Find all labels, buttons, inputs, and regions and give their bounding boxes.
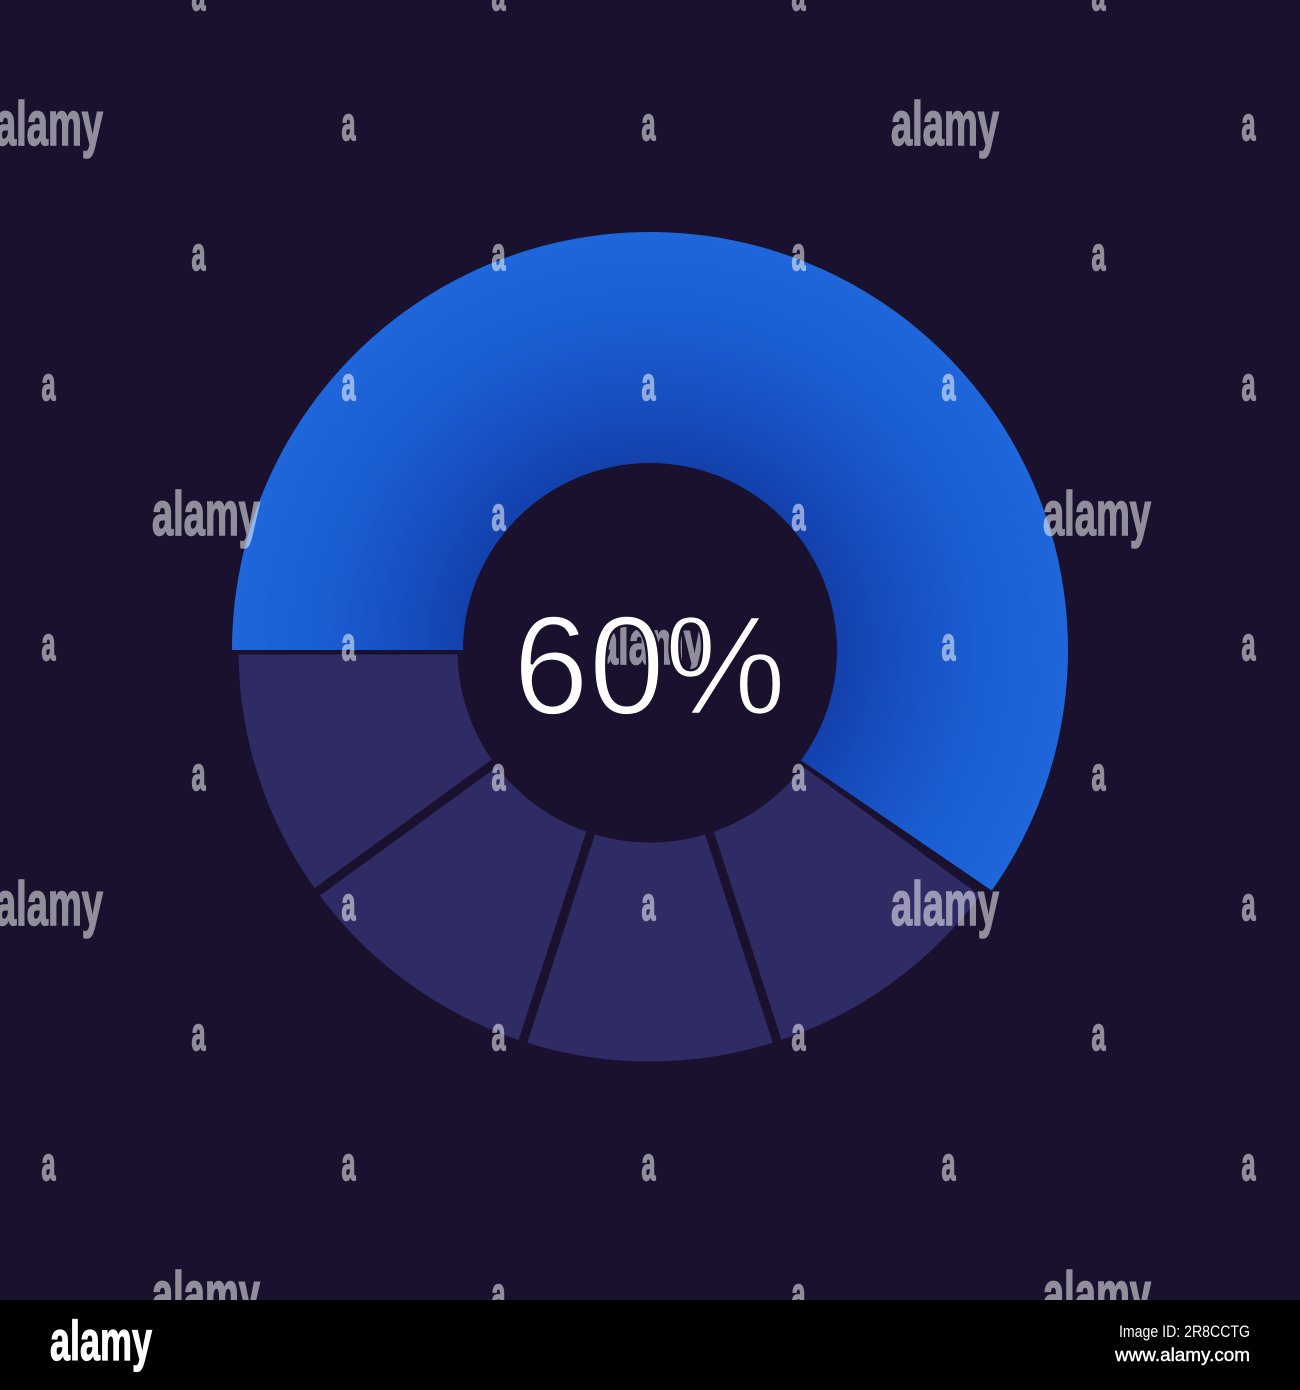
footer logo: alamy [50,1309,152,1372]
inactive segment 1 [708,760,987,1046]
watermark pattern: a [42,1137,56,1190]
watermark pattern: a [792,747,806,800]
image id: Image ID: 2R8CCTG [1119,1322,1250,1341]
watermark pattern: a [642,357,656,410]
watermark pattern: a [642,1137,656,1190]
watermark pattern: a [492,1007,506,1060]
inactive segment 4 [234,650,498,895]
watermark pattern: a [492,1267,506,1320]
watermark pattern: alamy [0,870,103,939]
watermark pattern: a [642,877,656,930]
watermark pattern: a [42,357,56,410]
watermark pattern: alamy [597,609,705,678]
watermark pattern: a [1242,357,1256,410]
watermark pattern: a [1092,1007,1106,1060]
center percentage label: 60% [513,586,786,744]
watermark pattern: a [342,1137,356,1190]
watermark pattern: a [792,1267,806,1320]
watermark pattern: a [1092,747,1106,800]
watermark pattern: a [942,617,956,670]
watermark pattern: alamy [891,90,999,159]
watermark pattern: a [342,357,356,410]
watermark pattern: a [792,1007,806,1060]
watermark pattern: a [792,487,806,540]
watermark pattern: a [342,617,356,670]
watermark pattern: a [792,227,806,280]
watermark pattern: a [342,877,356,930]
watermark pattern: a [492,747,506,800]
watermark pattern: a [492,487,506,540]
watermark pattern: a [1242,617,1256,670]
website url: www.alamy.com [1114,1345,1250,1365]
watermark pattern: a [642,97,656,150]
donut chart [232,232,1068,1066]
watermark pattern: alamy [152,480,260,549]
watermark pattern: a [1242,97,1256,150]
watermark pattern: alamy [891,870,999,939]
watermark pattern: a [492,227,506,280]
active blue arc 60 percent [232,232,1068,891]
watermark pattern: alamy [1043,1260,1151,1329]
watermark pattern: a [192,747,206,800]
watermark pattern: a [192,227,206,280]
watermark pattern: alamy [1043,480,1151,549]
footer bar [0,1300,1300,1390]
watermark pattern: alamy [0,90,103,159]
watermark pattern: a [1242,877,1256,930]
inactive segment 3 [313,760,592,1046]
watermark pattern: a [942,1137,956,1190]
inactive segment 2 [521,829,779,1066]
watermark pattern: a [42,617,56,670]
watermark pattern: a [1242,1137,1256,1190]
watermark pattern: alamy [152,1260,260,1329]
watermark pattern: a [1092,227,1106,280]
watermark pattern: a [192,1007,206,1060]
watermark pattern: a [342,97,356,150]
watermark pattern: a [942,357,956,410]
